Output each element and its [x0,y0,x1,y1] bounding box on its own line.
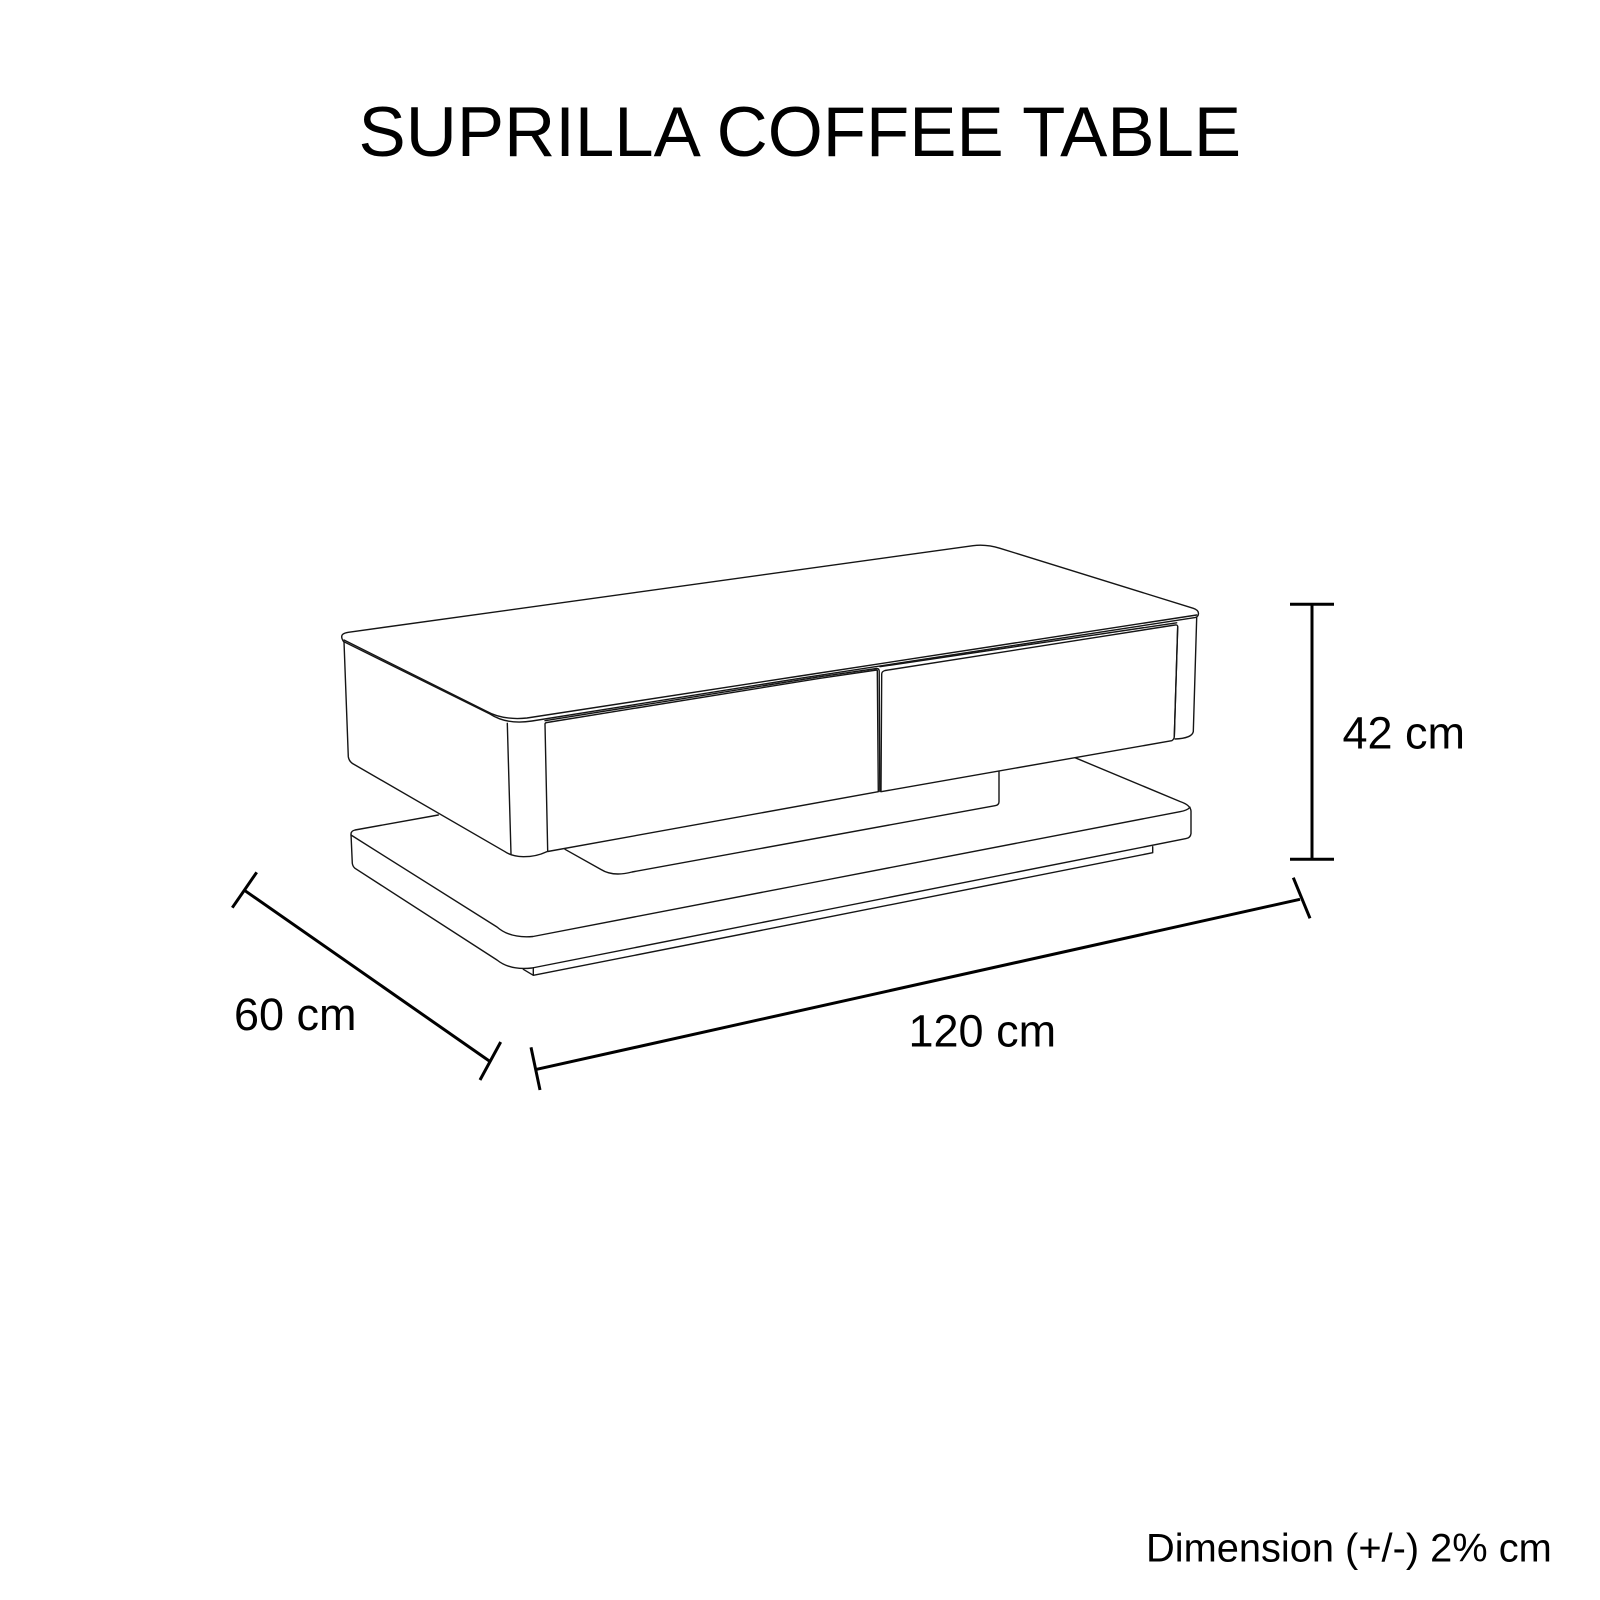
dimension label: 120 cm: 120 cm [908,1006,1056,1057]
dimension label: 42 cm: 42 cm [1342,707,1465,758]
dimension arrow: width 120 cm [531,878,1310,1090]
left drawer [545,668,880,852]
right drawer [880,623,1178,792]
table top surface [342,545,1198,722]
dimension arrow: depth 60 cm [232,872,501,1080]
title: SUPRILLA COFFEE TABLE [358,93,1241,172]
tolerance note: Dimension (+/-) 2% cm [1146,1527,1552,1571]
dimension arrow: height 42 cm [1290,604,1334,859]
base foot [523,847,1153,975]
base plinth [351,758,1191,968]
dimension label: 60 cm: 60 cm [234,989,357,1040]
table body side and corners [344,617,1197,857]
central pedestal [565,772,999,874]
illustration: coffee table line drawing [342,545,1198,975]
